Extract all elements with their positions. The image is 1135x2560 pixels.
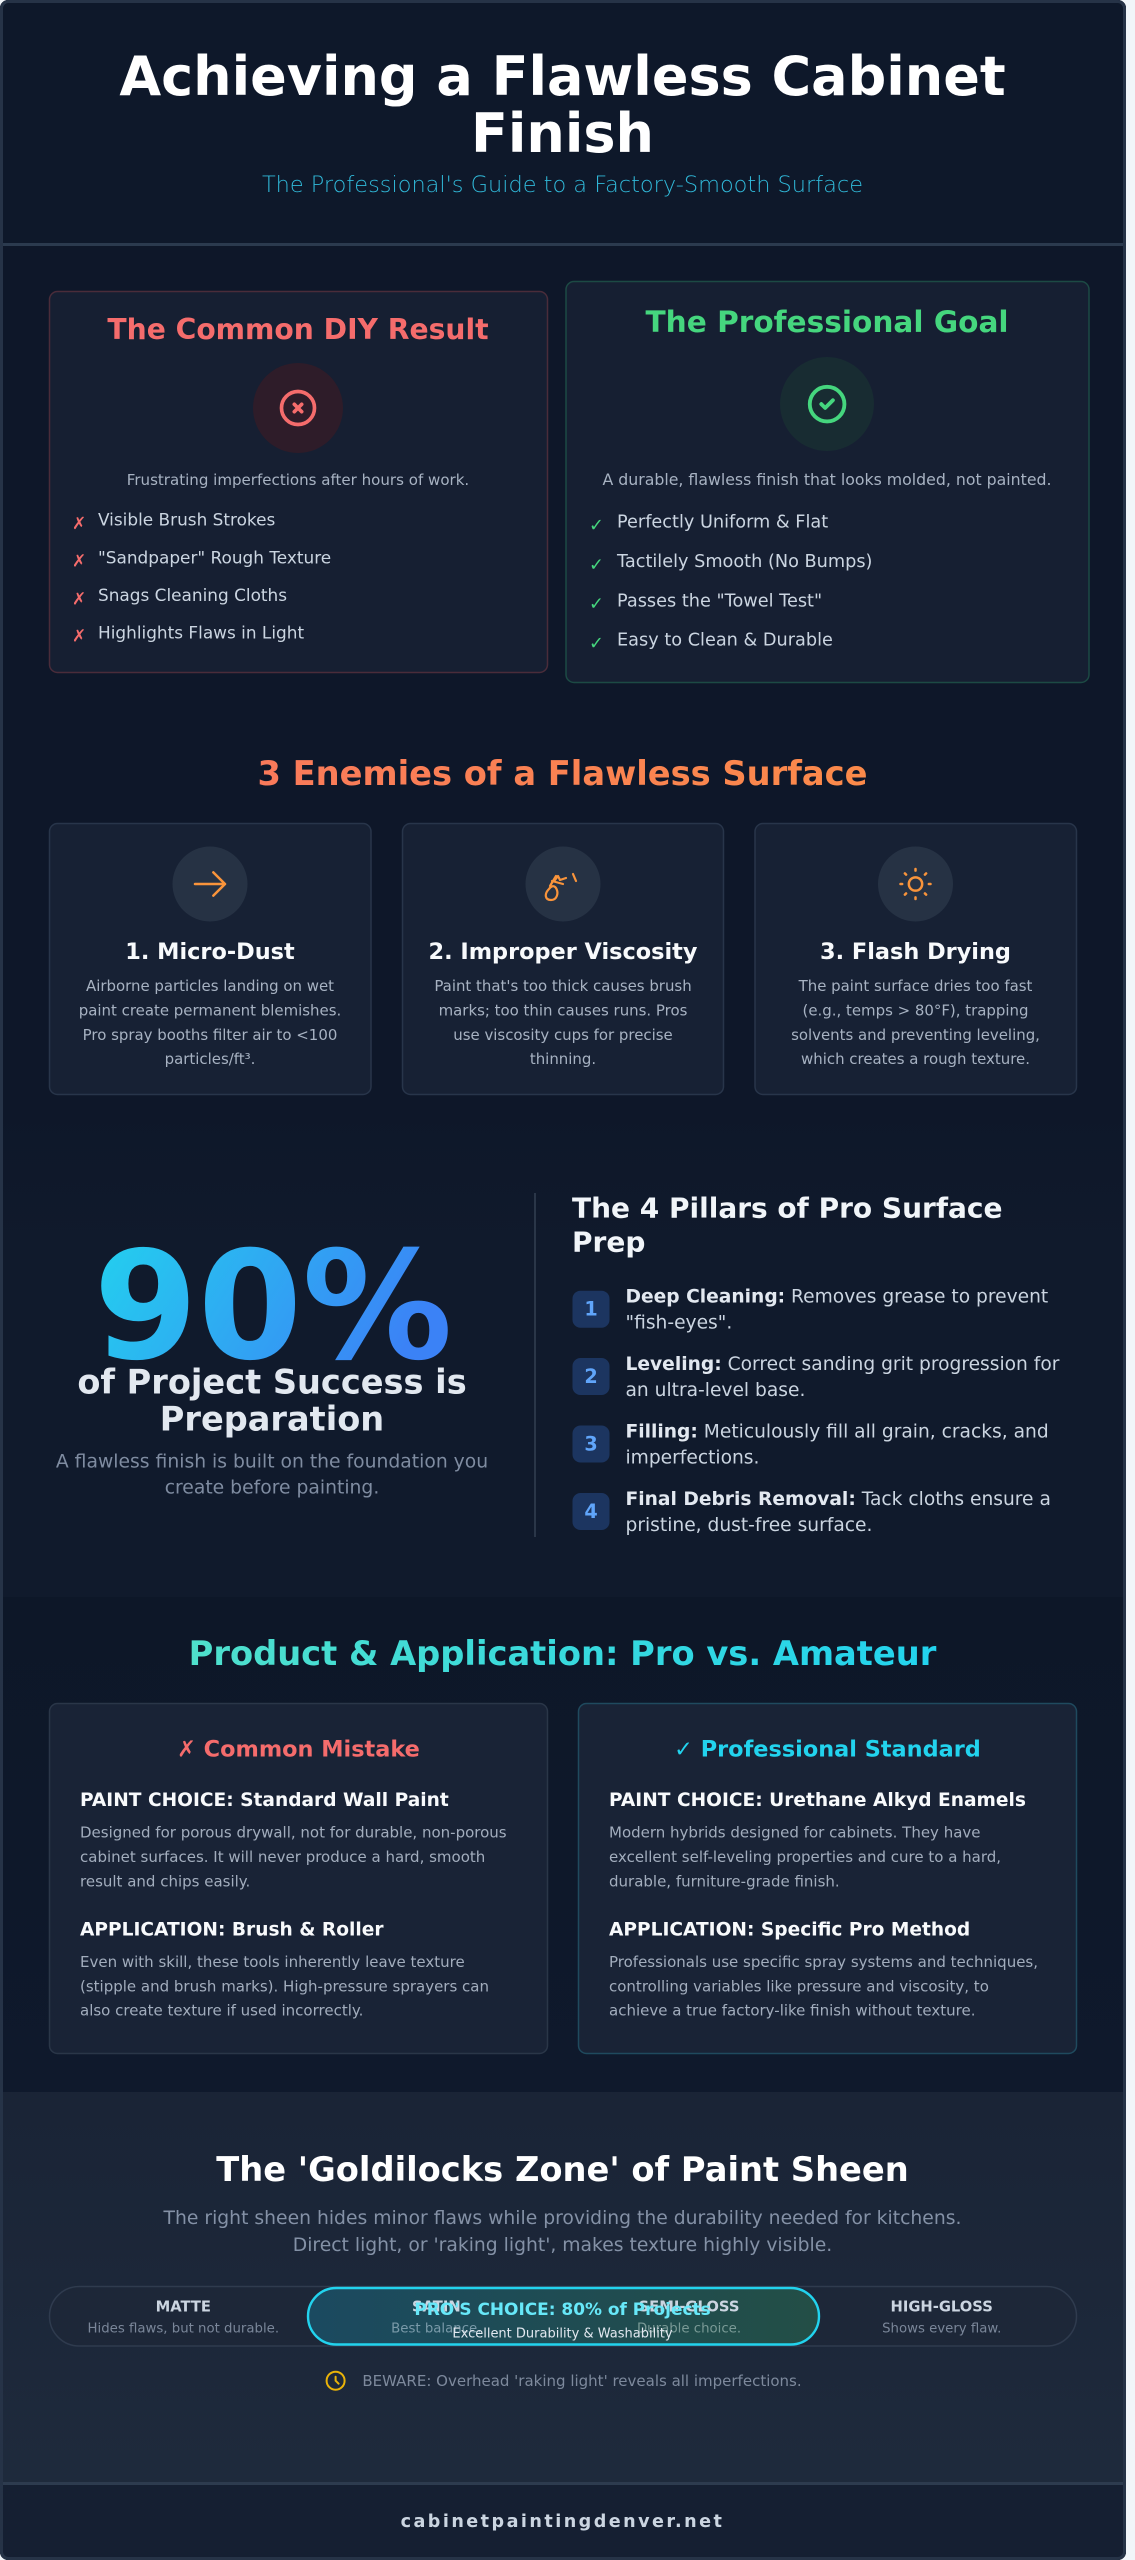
pro list: ✓ (589, 555, 604, 575)
card text: solvents and preventing leveling, (791, 1026, 1040, 1044)
stat label: Preparation (160, 1400, 384, 1439)
pro list: Perfectly Uniform & Flat (617, 513, 828, 533)
sheen: matte (88, 2299, 279, 2337)
panel: common mistake: result and chips easily. (80, 1872, 250, 1890)
icon: sun (878, 846, 953, 922)
standard: paint choice: PAINT CHOICE: Urethane Alkyd Enamels (609, 1790, 1026, 1811)
panel: improper viscosity (402, 824, 724, 1094)
standard heading: ✓ Professional Standard (674, 1737, 981, 1763)
pillar 3 (572, 1422, 1049, 1469)
title: Finish (471, 102, 654, 165)
pro's choice label: PRO'S CHOICE: 80% of Projects (414, 2299, 711, 2319)
pro's choice label (414, 2299, 711, 2341)
pillar 2: 2 (584, 1365, 598, 1388)
card text (434, 977, 692, 1068)
card text: marks; too thin causes runs. Pros (439, 1001, 688, 1019)
card text (79, 977, 341, 1068)
panel: professional standard: controlling variables like pressure and viscosity, to (609, 1977, 989, 1995)
card text: paint create permanent blemishes. (79, 1001, 341, 1019)
panel: flash drying (755, 824, 1076, 1094)
pro list (589, 513, 872, 654)
pro intro: A durable, flawless finish that looks molded, not painted. (602, 470, 1052, 489)
goldilocks intro: Direct light, or 'raking light', makes texture highly visible. (293, 2235, 832, 2256)
sheen: satin (391, 2299, 481, 2337)
panel: professional standard: excellent self-leveling properties and cure to a hard, (609, 1848, 1001, 1866)
subtitle: The Professional's Guide to a Factory-Smooth Surface (262, 172, 863, 198)
sheen: matte: MATTE (156, 2299, 211, 2316)
pro list: Passes the "Towel Test" (617, 591, 822, 611)
card text: Paint that's too thick causes brush (434, 977, 692, 995)
pillar 3: Filling: (626, 1422, 698, 1443)
panel: common mistake: cabinet surfaces. It will never produce a hard, smooth (80, 1848, 485, 1866)
sheen scale (50, 2286, 1076, 2346)
icon: check in circle (780, 357, 874, 451)
card title: 3. Flash Drying (820, 939, 1011, 965)
section background: product and application (0, 1597, 1126, 2092)
sheen: semi-gloss (637, 2299, 741, 2337)
mistake: paint choice: PAINT CHOICE: Standard Wall Paint (80, 1790, 449, 1811)
section: goldilocks zone (0, 2092, 1126, 2484)
panel: common mistake: also create texture if used incorrectly. (80, 2002, 363, 2020)
panel: professional goal (566, 282, 1089, 682)
sheen: high-gloss: Shows every flaw. (882, 2322, 1001, 2337)
heading: product and application: Product & Application: Pro vs. Amateur (189, 1634, 937, 1673)
pillar 2 (572, 1356, 1060, 1396)
pillar 1 (572, 1287, 1048, 1334)
icon: paint spray scribble (526, 846, 600, 922)
heading: 3 enemies: 3 Enemies of a Flawless Surface (258, 754, 867, 793)
DIY intro: Frustrating imperfections after hours of work. (127, 471, 469, 489)
DIY heading: The Common DIY Result (107, 313, 489, 346)
section background: preparation (0, 1110, 1126, 1597)
panel: common DIY result (50, 292, 548, 672)
sheen: semi-gloss: SEMI-GLOSS (639, 2299, 739, 2316)
stat caption: A flawless finish is built on the foundation you (56, 1451, 488, 1472)
pillars heading: Prep (572, 1226, 645, 1259)
panel: professional standard (578, 1704, 1076, 2054)
footer (0, 2482, 1126, 2560)
sheen: high-gloss (882, 2299, 1001, 2337)
DIY list: Visible Brush Strokes (98, 510, 275, 530)
pillar 2: an ultra-level base. (626, 1380, 805, 1401)
sheen: matte: Hides flaws, but not durable. (88, 2322, 279, 2337)
panel: common mistake: Even with skill, these tools inherently leave texture (80, 1953, 465, 1971)
card text: use viscosity cups for precise (453, 1026, 673, 1044)
card text: Pro spray booths filter air to <100 (83, 1026, 337, 1044)
pillar 4: pristine, dust-free surface. (626, 1515, 872, 1536)
pro's choice label: Excellent Durability & Washability (452, 2326, 673, 2341)
DIY list: ✗ (72, 588, 86, 608)
panel: professional standard: durable, furniture-grade finish. (609, 1872, 840, 1890)
DIY list: "Sandpaper" Rough Texture (98, 547, 331, 567)
DIY list: ✗ (72, 551, 86, 571)
DIY list: Highlights Flaws in Light (98, 622, 304, 642)
icon: clock warning (327, 2372, 345, 2390)
pillar 4: 4 (584, 1500, 598, 1523)
card text (791, 977, 1040, 1068)
DIY list: Snags Cleaning Cloths (98, 585, 287, 605)
pro list: Tactilely Smooth (No Bumps) (616, 552, 872, 572)
panel: 4 pillars (572, 1192, 1060, 1536)
sheen: high-gloss: HIGH-GLOSS (891, 2299, 993, 2316)
stat label: of Project Success is (77, 1362, 467, 1401)
pro's choice highlight (308, 2288, 819, 2344)
mistake: application: APPLICATION: Brush & Roller (80, 1920, 384, 1941)
pillar 1: "fish-eyes". (626, 1313, 732, 1334)
card text: Airborne particles landing on wet (86, 977, 334, 995)
DIY list: ✗ (72, 626, 86, 646)
pillars heading: The 4 Pillars of Pro Surface (572, 1192, 1002, 1225)
panel: common mistake (50, 1704, 548, 2054)
card text: particles/ft³. (165, 1050, 255, 1068)
standard: application: APPLICATION: Specific Pro Method (609, 1920, 970, 1941)
panel: common mistake: (stipple and brush marks). High-pressure sprayers can (80, 1977, 489, 1995)
mistake heading: ✗ Common Mistake (177, 1737, 420, 1763)
pillar 3: Meticulously fill all grain, cracks, and (698, 1422, 1049, 1443)
pillar 1: Removes grease to prevent (785, 1287, 1048, 1308)
goldilocks heading: The 'Goldilocks Zone' of Paint Sheen (216, 2150, 909, 2189)
header (0, 0, 1126, 153)
icon: arrow (172, 846, 248, 922)
pro list: ✓ (589, 634, 604, 654)
card text: The paint surface dries too fast (798, 977, 1033, 995)
pro heading: The Professional Goal (645, 305, 1009, 339)
pillar 4: Final Debris Removal: (626, 1489, 856, 1510)
pillar 3: imperfections. (626, 1448, 759, 1469)
panel: professional standard: Professionals use specific spray systems and techniques, (609, 1953, 1038, 1971)
pillar 4 (572, 1489, 1051, 1536)
footer url: cabinetpaintingdenver.net (401, 2512, 724, 2532)
sheen: satin: SATIN (412, 2299, 461, 2316)
panel: micro-dust (50, 824, 371, 1094)
panel: professional standard: Modern hybrids designed for cabinets. They have (609, 1824, 981, 1842)
pillar 1: 1 (584, 1298, 598, 1320)
pillar 1: Deep Cleaning: (626, 1287, 785, 1308)
pro list: Easy to Clean & Durable (617, 631, 833, 651)
icon: x in circle (253, 363, 343, 453)
card title: 2. Improper Viscosity (429, 939, 698, 965)
pro list: ✓ (589, 516, 604, 536)
pillar 2: Leveling: (626, 1354, 722, 1375)
card text: thinning. (530, 1050, 596, 1068)
stat: 90 percent (56, 1246, 486, 1498)
sheen: semi-gloss: Durable choice. (637, 2322, 741, 2337)
title: Achieving a Flawless Cabinet (119, 45, 1006, 108)
pro list: ✓ (589, 595, 604, 615)
pillar 4: Tack cloths ensure a (856, 1489, 1051, 1510)
sheen: satin: Best balance. (391, 2322, 481, 2337)
beware note: BEWARE: Overhead 'raking light' reveals all imperfections. (362, 2372, 802, 2390)
panel: professional standard: achieve a true factory-like finish without texture. (609, 2002, 976, 2020)
pillar 2: Correct sanding grit progression for (722, 1354, 1060, 1375)
pillar 3: 3 (584, 1432, 598, 1455)
panel: common mistake: Designed for porous drywall, not for durable, non-porous (80, 1824, 507, 1842)
card text: (e.g., temps > 80°F), trapping (803, 1001, 1028, 1019)
DIY list (72, 510, 331, 646)
goldilocks intro: The right sheen hides minor flaws while providing the durability needed for kitchens. (163, 2208, 961, 2229)
stat caption: create before painting. (165, 1477, 379, 1498)
DIY list: ✗ (72, 513, 86, 533)
card title: 1. Micro-Dust (125, 939, 295, 965)
big number: 90% (93, 1220, 453, 1394)
card text: which creates a rough texture. (801, 1050, 1030, 1068)
